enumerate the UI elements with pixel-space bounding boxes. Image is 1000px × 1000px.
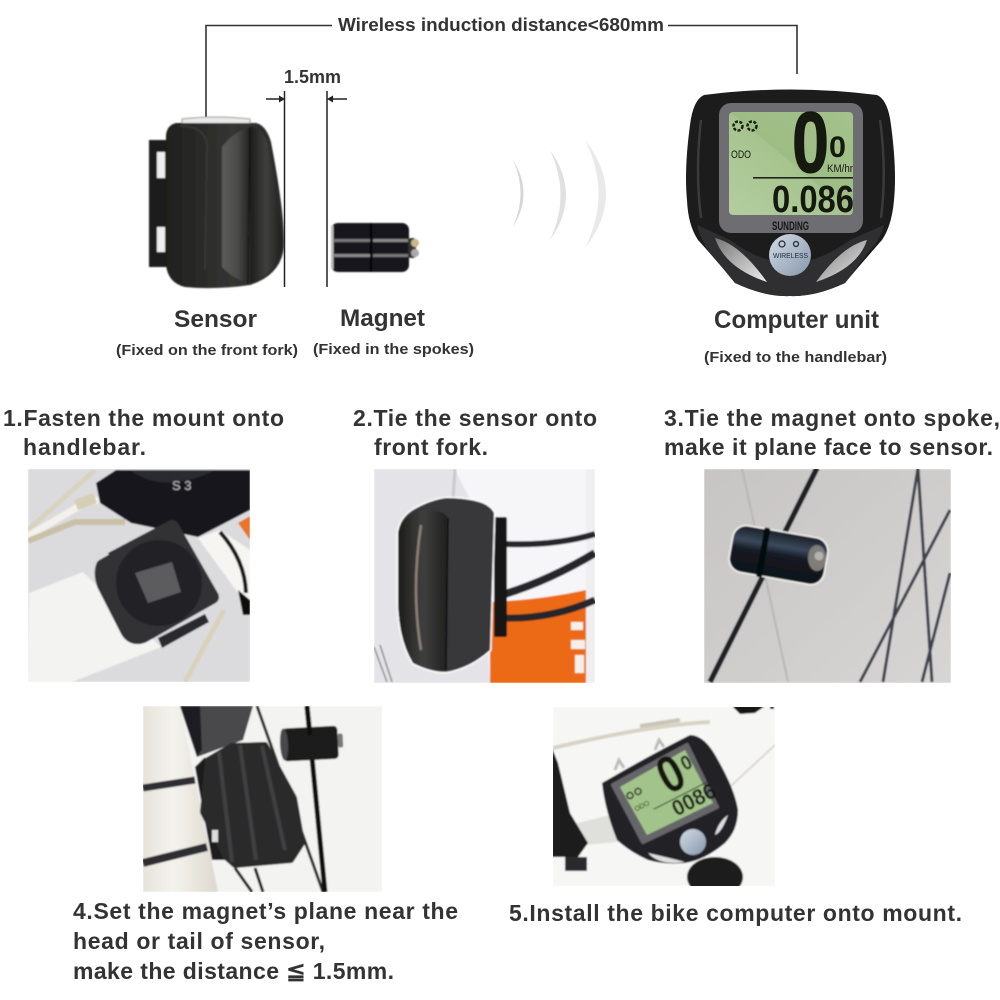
computer unit illustration [686, 90, 895, 296]
step 4 caption [73, 898, 458, 984]
label: sensor: Sensor [174, 306, 257, 333]
speed reading: 0 [792, 95, 829, 191]
dimension: 1.5mm gap: 1.5mm [284, 67, 341, 87]
step 5 caption: 5.Install the bike computer onto mount. [509, 900, 962, 926]
step 2 heading: 2.Tie the sensor onto [353, 405, 597, 431]
small speed digit: 0 [829, 131, 846, 164]
label: magnet: Magnet [340, 305, 425, 332]
speed unit: KM/hr [827, 163, 853, 175]
step 4 caption: make the distance ≦ 1.5mm. [73, 958, 394, 984]
photo: computer on mount: 0 [647, 743, 695, 806]
odometer label: ODO [731, 149, 751, 161]
step 4 caption: head or tail of sensor, [73, 928, 325, 954]
lower vents [715, 238, 867, 282]
wireless button: WIRELESS [773, 251, 808, 260]
step 1 heading: handlebar. [23, 434, 146, 460]
photo: computer on mount: 0086 [668, 778, 720, 821]
brand label: SUNDING [772, 219, 809, 233]
lcd divider [753, 177, 853, 179]
sensor illustration [149, 117, 284, 288]
photo: sensor and magnet alignment [143, 706, 382, 892]
label: computer unit [704, 306, 887, 366]
dimension: 1.5mm gap [266, 67, 347, 287]
step 3 heading: make it plane face to sensor. [664, 434, 993, 460]
photo: mount on handlebar: S 3 [172, 478, 192, 493]
dimension: wireless induction distance: Wireless induction distance<680mm [338, 15, 664, 35]
photo: computer on mount: 0 [677, 751, 696, 775]
photo: computer on mount: ODO [634, 800, 652, 813]
lcd screen [729, 112, 853, 215]
photo: computer on mount [552, 706, 775, 897]
step 3 heading: 3.Tie the magnet onto spoke, [664, 405, 1000, 431]
step 2 heading [353, 405, 597, 460]
step 1 heading [3, 405, 284, 460]
step 3 heading [664, 405, 1000, 460]
wheel icons [734, 122, 756, 130]
step 4 caption: 4.Set the magnet’s plane near the [73, 898, 458, 924]
wireless signal arcs [513, 140, 606, 248]
photo: mount on handlebar [28, 469, 250, 682]
label: sensor: (Fixed on the front fork) [116, 342, 298, 359]
label: magnet: (Fixed in the spokes) [313, 341, 474, 358]
step 1 heading: 1.Fasten the mount onto [3, 405, 284, 431]
label: magnet [313, 305, 474, 358]
photo: sensor on front fork [374, 469, 595, 683]
wireless button [769, 234, 811, 276]
label: computer unit: Computer unit [714, 306, 880, 334]
magnet illustration [331, 223, 419, 272]
label: sensor [116, 306, 298, 359]
lcd bezel [719, 103, 863, 233]
dimension: wireless induction distance [206, 15, 797, 117]
odometer reading: 0.086 [772, 179, 854, 221]
photo: magnet on spoke [704, 468, 951, 683]
label: computer unit: (Fixed to the handlebar) [704, 349, 887, 366]
step 2 heading: front fork. [374, 434, 488, 460]
